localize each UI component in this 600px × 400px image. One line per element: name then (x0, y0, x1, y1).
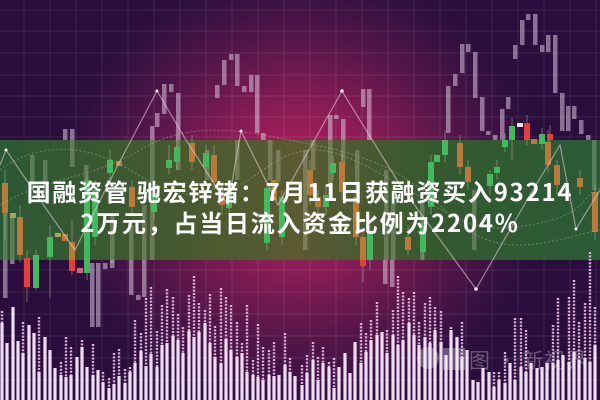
candle wicks (5, 115, 595, 302)
watermark: 图 · 新视界 (469, 345, 587, 375)
dotted volume columns (2, 252, 595, 388)
solid volume bars (2, 307, 595, 400)
title line 2: 2万元，占当日流入资金比例为2204% (80, 204, 520, 239)
watermark (417, 345, 587, 375)
green title band (0, 140, 600, 260)
red candles and small dojis (10, 123, 553, 287)
pale upper and lower candlesticks (3, 14, 590, 327)
zig-zag trend line (0, 89, 600, 291)
muted candlesticks inside band (3, 140, 596, 263)
orange candles (2, 142, 598, 260)
green candles (33, 126, 545, 288)
title line 1: 国融资管 驰宏锌锗：7月11日获融资买入93214 (27, 173, 573, 208)
dotted moving-average curves (0, 130, 600, 245)
